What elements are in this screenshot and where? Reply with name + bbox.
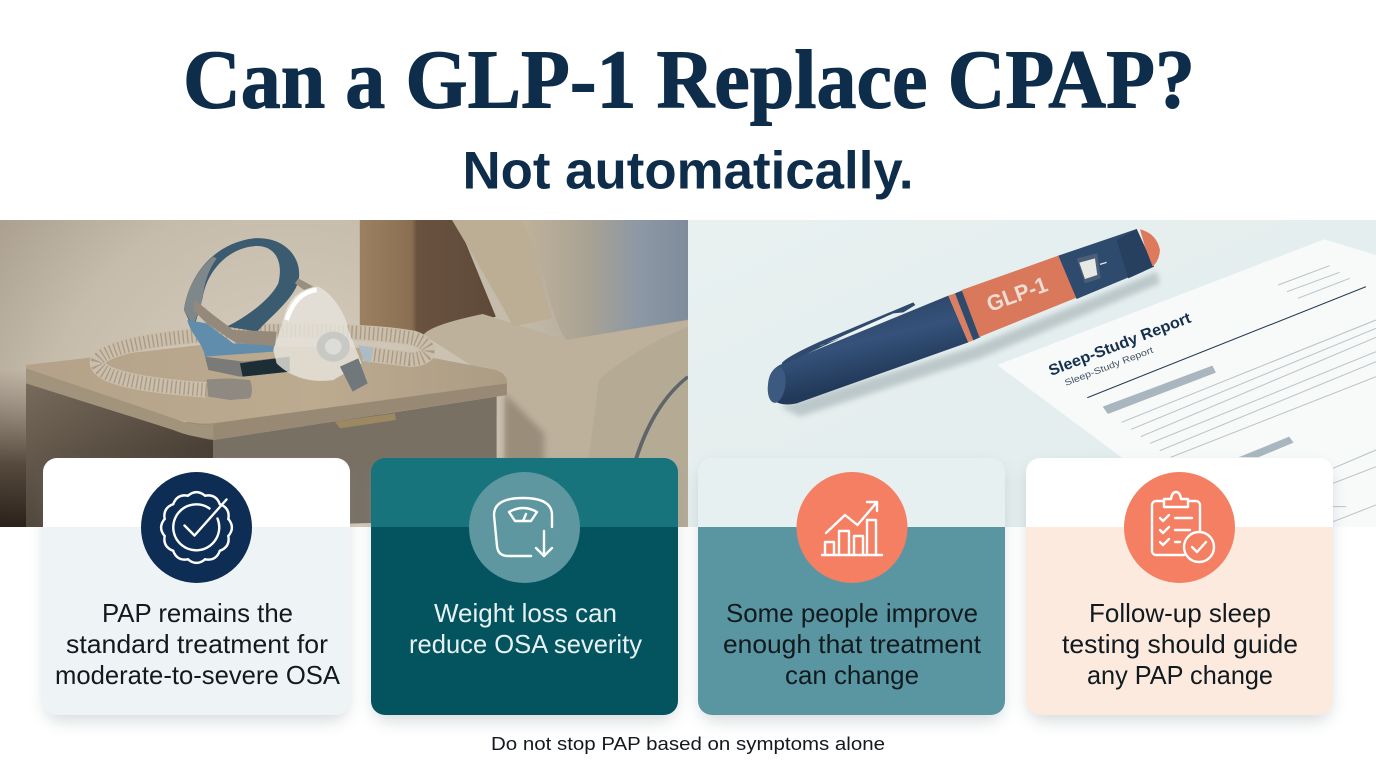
sleep-study report page <box>997 239 1376 530</box>
card text: testing should guide <box>1062 629 1298 659</box>
card text: Follow-up sleep <box>1089 598 1271 628</box>
card text: moderate-to-severe OSA <box>55 660 341 690</box>
card text: Some people improve <box>726 598 978 628</box>
blanket <box>505 327 688 530</box>
mask <box>273 287 373 392</box>
card text: reduce OSA severity <box>409 629 642 659</box>
card: some people improve <box>698 458 1005 721</box>
panel: white band below photos <box>0 527 1376 768</box>
card text <box>409 598 642 659</box>
photo: GLP-1 pen and sleep-study report <box>688 220 1376 530</box>
bed sheet <box>424 314 688 458</box>
footer note: Do not stop PAP based on symptoms alone <box>491 734 885 754</box>
hose <box>97 331 428 400</box>
card text <box>55 598 341 690</box>
report header line <box>1087 287 1366 398</box>
card text <box>1062 598 1298 690</box>
card text <box>723 598 982 690</box>
icon: rising bar chart <box>796 472 908 583</box>
title: Can a GLP-1 Replace CPAP? <box>183 34 1195 126</box>
pillows <box>452 220 688 340</box>
pen shadow <box>780 272 1160 417</box>
icon: scale with down arrow <box>469 472 580 583</box>
icon: clipboard checklist <box>1124 472 1235 583</box>
card text: standard treatment for <box>66 629 328 659</box>
nightstand <box>26 345 507 527</box>
card text: can change <box>785 660 919 690</box>
card text: any PAP change <box>1087 660 1273 690</box>
icon: rosette with check mark <box>141 472 252 583</box>
report heading: Sleep-Study Report <box>1046 310 1193 380</box>
headboard <box>360 220 496 337</box>
card: follow-up sleep testing <box>1026 458 1333 721</box>
card text: PAP remains the <box>102 598 293 628</box>
report grey bars <box>1103 366 1294 457</box>
report rules <box>1122 266 1376 522</box>
photo: CPAP mask and hose on a nightstand <box>0 220 688 530</box>
headgear <box>184 238 313 377</box>
card text: Weight loss can <box>434 598 617 628</box>
subtitle: Not automatically. <box>462 142 914 200</box>
card: PAP remains the standard <box>43 458 350 721</box>
report subheading: Sleep-Study Report <box>1063 345 1155 388</box>
card text: enough that treatment <box>723 629 982 659</box>
pen body <box>766 229 1160 404</box>
pen label: GLP-1 <box>983 272 1051 317</box>
card: weight loss <box>371 458 678 721</box>
